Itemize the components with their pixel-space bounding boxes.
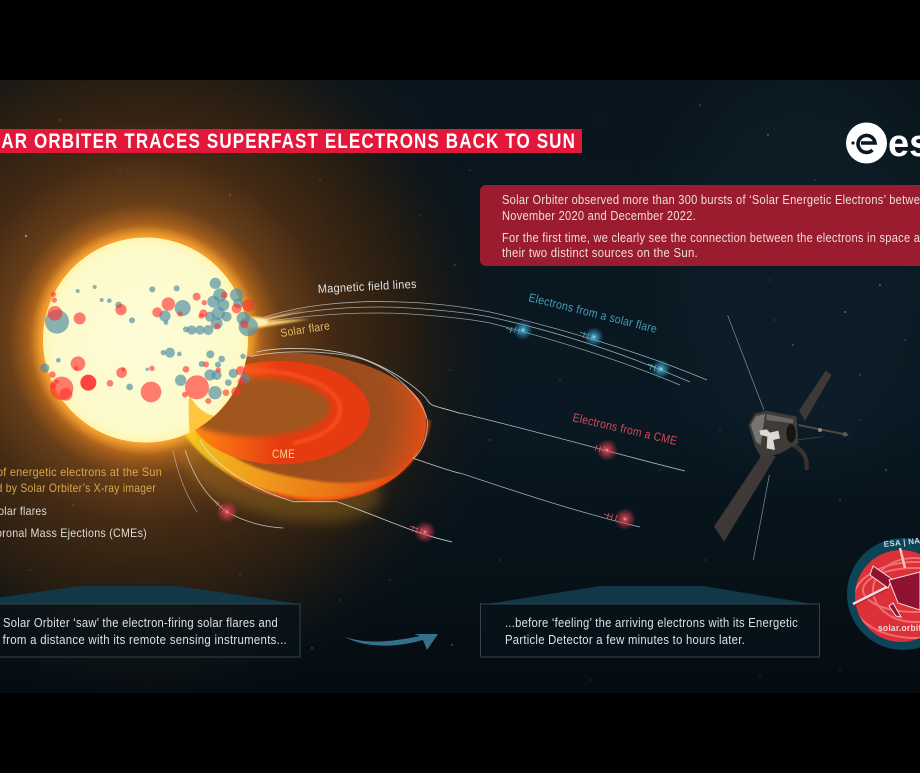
intro: first paragraph: November 2020 and December 2022. [502,209,696,223]
blue dots: solar flares [40,278,258,399]
label: magnetic field lines: Magnetic field lines [317,277,417,296]
cme: yellow lower band [180,427,397,500]
cme: lighter inner streak [230,370,340,443]
particle detector text: ...before ‘feeling’ the arriving electrons with its Energetic [505,616,798,630]
label: CME: CME [272,447,295,461]
label: electrons from a CME: Electrons from a CME [571,410,679,448]
background: deep space [0,80,920,693]
sun [43,238,248,442]
remote sensing text: Solar Orbiter ‘saw’ the electron-firing solar flares and [3,616,278,630]
panel: magnetic field lines from solar flare [262,302,707,385]
badge: spacecraft line drawing [853,548,920,617]
panel: remote sensing [0,586,300,657]
spacecraft: instrument boom [793,425,848,470]
red electrons along the CME field lines [215,439,636,543]
coronal mass ejection [169,353,429,540]
spacecraft: body [748,411,798,458]
spacecraft: solar arrays [714,370,832,542]
cme: outer rim glow [273,420,429,499]
spacecraft: Solar Orbiter [714,315,848,560]
cme: front crossing the sun disc [188,395,214,432]
intro: second paragraph: their two distinct sources on the Sun. [502,246,698,260]
panel: intro text [480,185,920,266]
particle detector text: Particle Detector a few minutes to hours later. [505,633,745,647]
cme: translucent outer body [190,353,426,501]
badge: ESA NASA Solar Orbiter mission patch [847,535,920,650]
sun halo [38,232,254,448]
label: solar flare: Solar flare [280,320,331,340]
arrow [345,634,438,650]
cme: inner red ring [180,361,370,464]
panel: energetic particle detector [480,586,820,657]
label: electrons from a solar flare: Electrons from a solar flare [527,290,659,336]
blue electrons along the flare field lines [506,320,671,379]
logo: ESA [846,122,920,165]
red dots: coronal mass ejections [48,292,254,404]
sun: observed electron burst locations, mapped from reference [40,278,258,404]
legend [0,465,162,540]
cme: faint yellow halo below [180,444,386,528]
panel: CME field lines [200,348,460,542]
panel: CME field line extensions and lower lines [173,413,685,528]
solar flare burst [242,309,310,330]
spacecraft: antenna booms [728,315,769,560]
